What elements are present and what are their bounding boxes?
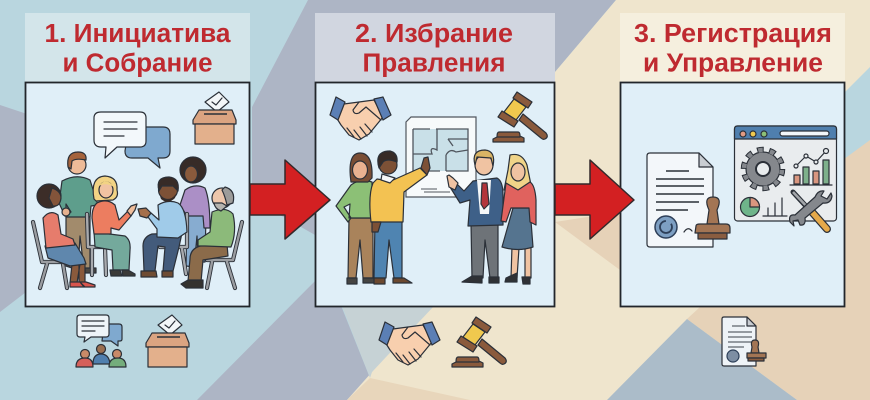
person: seated older man in green	[181, 187, 235, 288]
person: man in suit	[447, 150, 503, 283]
icon: bottom certificate document	[722, 317, 766, 366]
person: blonde woman in coral	[92, 176, 137, 276]
floor plan document	[406, 117, 476, 197]
icon: speech bubbles	[94, 112, 170, 168]
person: man in yellow pointing	[370, 151, 430, 284]
panel: step 2 board illustration	[316, 82, 554, 306]
chair: far right	[207, 222, 242, 288]
people seated in a circle	[33, 152, 242, 288]
panel: step 1 meeting illustration	[26, 82, 250, 306]
panel: step 2 heading: Правления	[362, 50, 506, 78]
panel: step 1 heading	[25, 13, 250, 82]
icon: bottom gavel	[452, 317, 506, 367]
person: woman in red seated	[37, 184, 95, 287]
pie chart	[740, 198, 760, 216]
icon: ballot box	[193, 92, 236, 144]
icon: stamp	[695, 197, 730, 239]
person: woman in green top	[336, 153, 375, 284]
panel: step 3 heading: и Управление	[643, 50, 823, 78]
panel: step 1 heading: 1. Инициатива	[44, 20, 231, 48]
bar and line chart	[790, 148, 832, 185]
icon group: bottom discussion and people	[76, 315, 126, 367]
panel: step 2 heading	[315, 13, 555, 82]
icon: gear	[744, 150, 782, 188]
icon: bottom ballot box	[146, 315, 189, 367]
panel: step 3 heading	[620, 13, 845, 82]
small bars	[763, 198, 787, 216]
arrow: step 2 to step 3	[555, 160, 634, 239]
person: standing woman in purple	[180, 157, 210, 267]
panel: step 3 registration illustration	[620, 82, 844, 306]
chair: seated man	[160, 214, 187, 274]
panel: step 3 heading: 3. Регистрация	[634, 20, 832, 48]
person: blonde woman in red	[501, 154, 536, 284]
panel: step 2 heading: 2. Избрание	[355, 20, 513, 48]
person: seated man in blue	[138, 177, 187, 277]
chair: far left	[33, 222, 68, 288]
icon: wrench and screwdriver	[790, 191, 832, 229]
icon: document with seal	[647, 153, 730, 247]
icon: gavel	[493, 92, 547, 142]
chair: blonde woman	[87, 214, 112, 275]
panel: step 1 heading: и Собрание	[62, 50, 212, 78]
icon: bottom handshake	[379, 322, 440, 365]
arrow: step 1 to step 2	[250, 160, 330, 239]
person: standing man in green	[59, 152, 98, 273]
icon: management dashboard window	[734, 126, 836, 229]
icon: handshake	[330, 97, 391, 140]
